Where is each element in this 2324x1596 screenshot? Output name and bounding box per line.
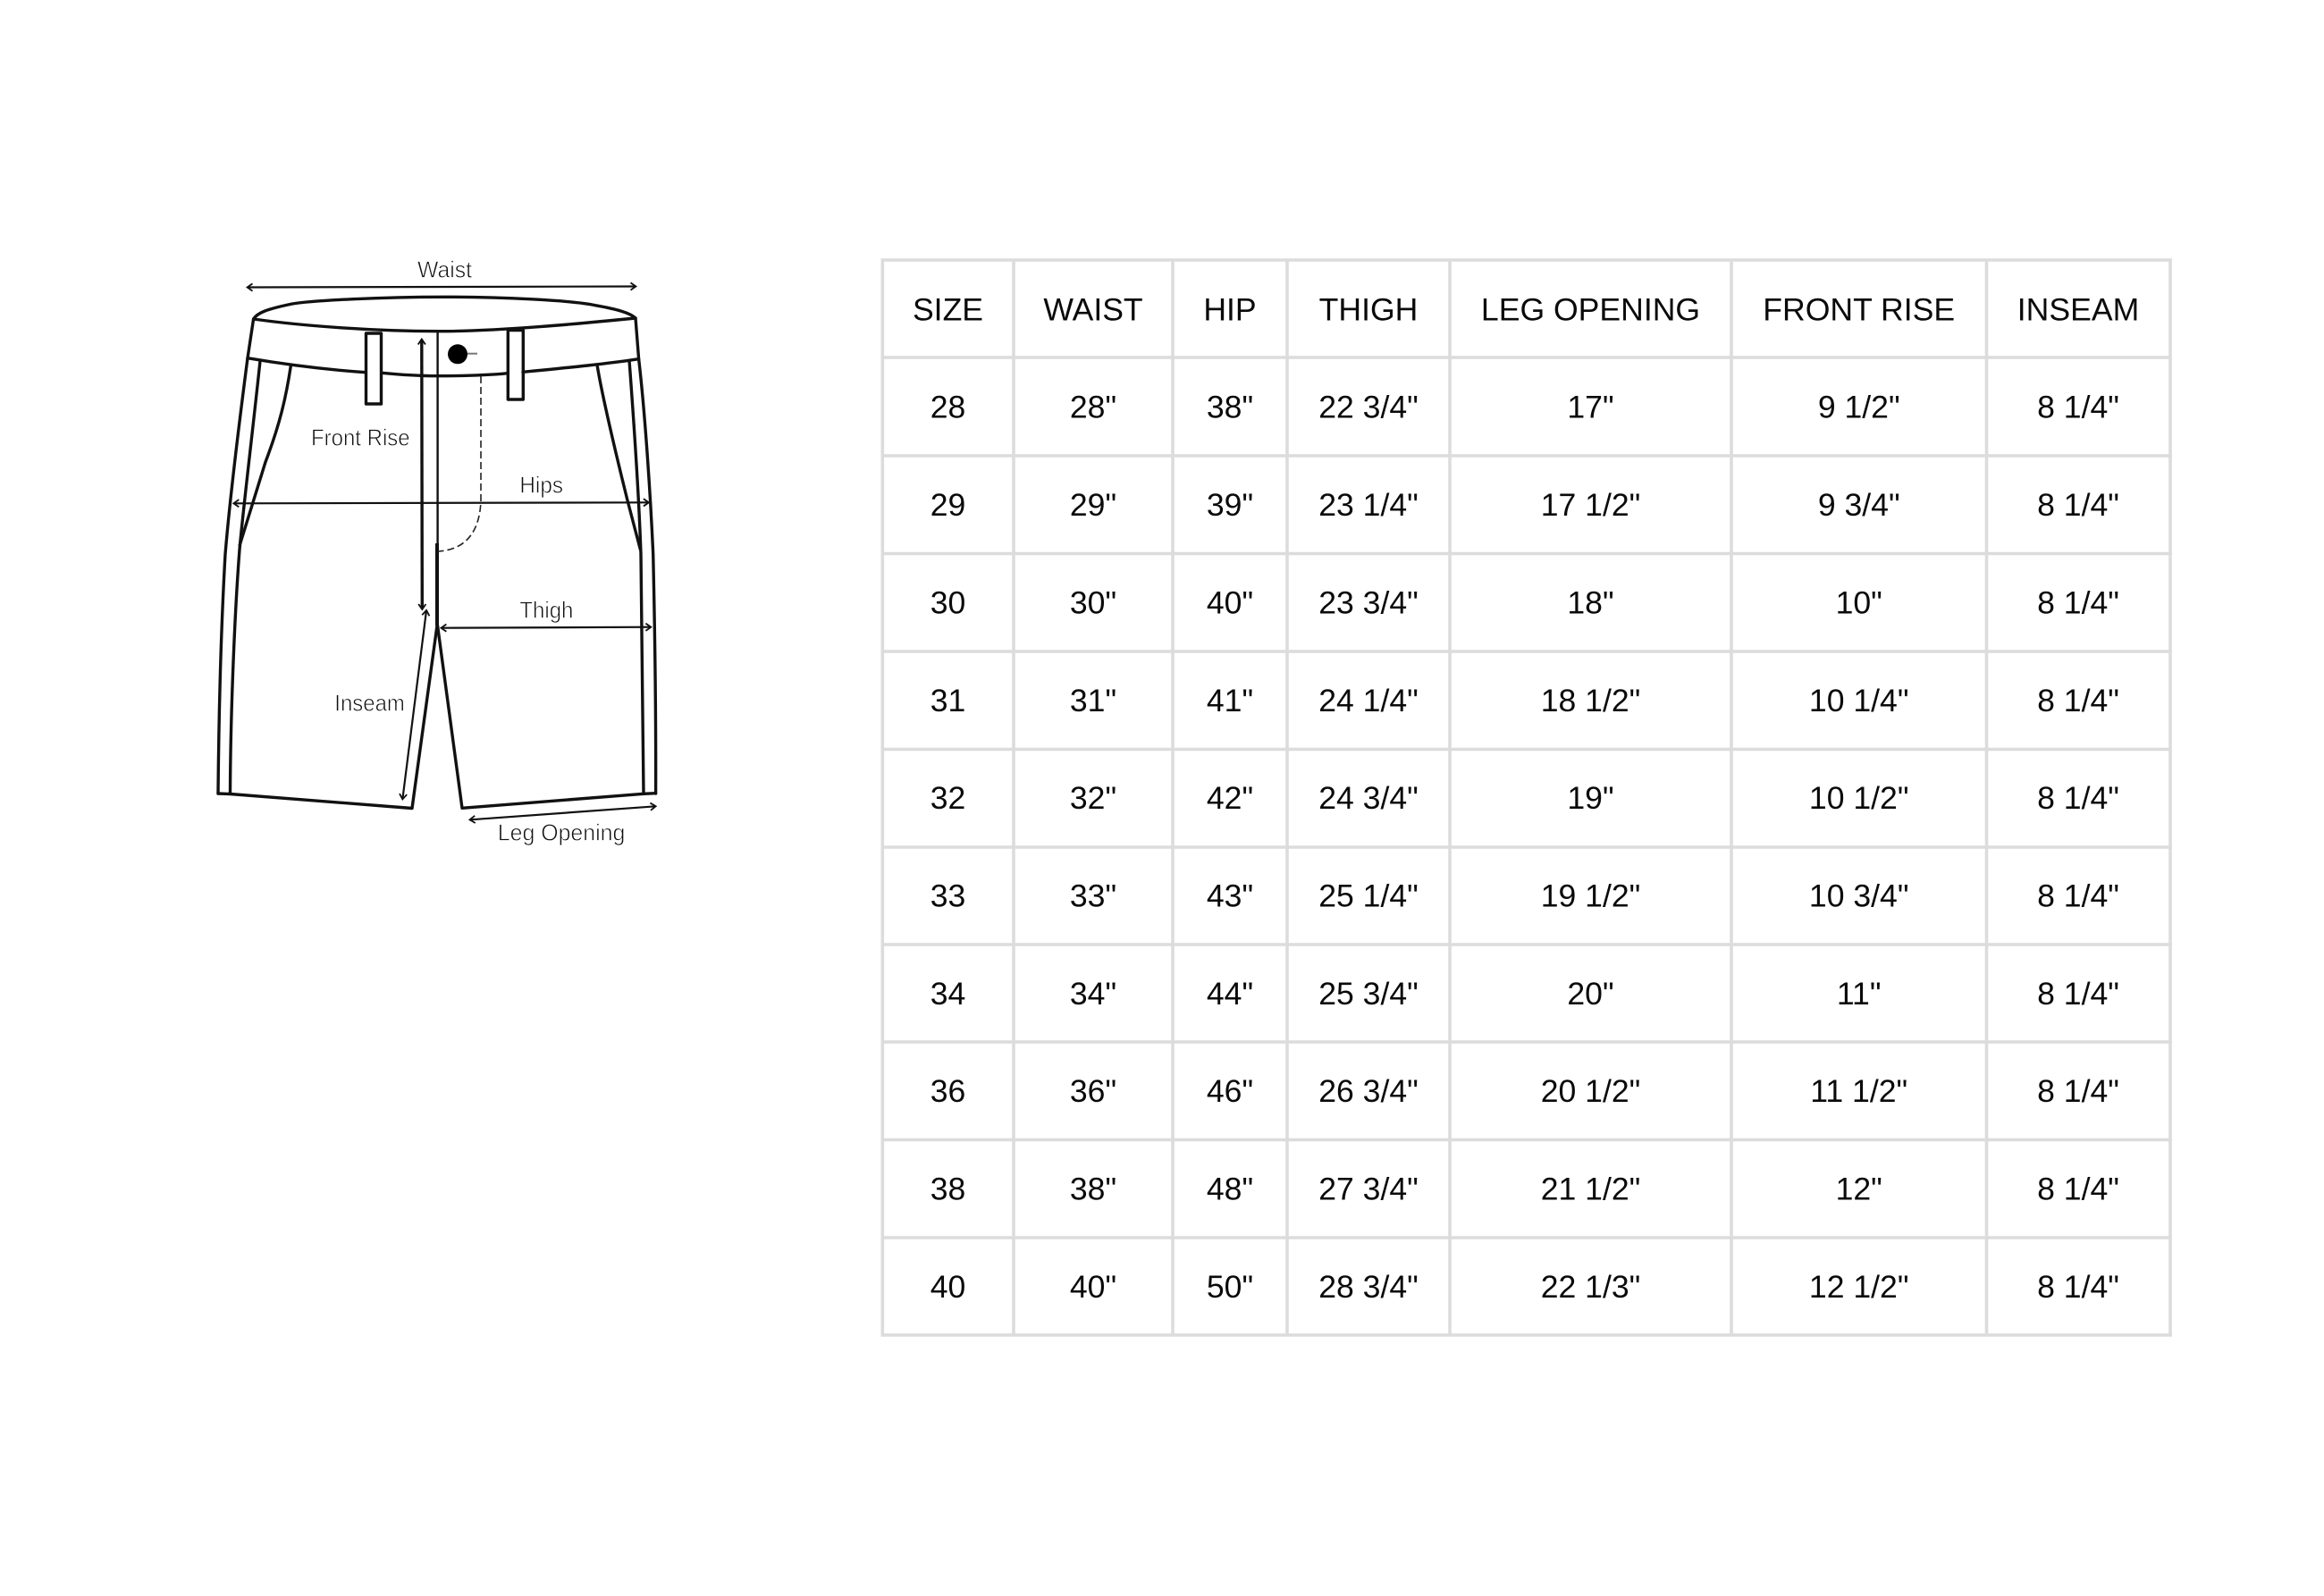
left pocket bbox=[240, 365, 290, 545]
row: size 28: 28 bbox=[930, 390, 965, 425]
row: size 28: 38" bbox=[1207, 390, 1253, 425]
row: size 40: 8 1/4" bbox=[2037, 1269, 2119, 1305]
row: size 30: 18" bbox=[1567, 584, 1614, 620]
row: size 38: 48" bbox=[1207, 1172, 1253, 1207]
row: size 33: 43" bbox=[1207, 878, 1253, 913]
button thread bbox=[467, 353, 477, 355]
size chart table bbox=[881, 260, 2172, 1335]
fly centre seam bbox=[436, 332, 439, 543]
row: size 29: 23 1/4" bbox=[1318, 487, 1419, 523]
label: thigh: Thigh bbox=[519, 597, 573, 624]
right inner side stripe bbox=[629, 360, 644, 794]
row: size 40: 40" bbox=[1070, 1269, 1116, 1305]
row: size 34: 8 1/4" bbox=[2037, 976, 2119, 1012]
row: size 33: 8 1/4" bbox=[2037, 878, 2119, 913]
row: size 31: 31" bbox=[1070, 683, 1116, 718]
arrow: thigh bbox=[442, 627, 651, 628]
row: size 32: 42" bbox=[1207, 780, 1253, 816]
arrow: inseam bbox=[402, 610, 426, 799]
row: size 34: 44" bbox=[1207, 976, 1253, 1012]
row: size 34: 25 3/4" bbox=[1318, 976, 1419, 1012]
row: size 33 bbox=[930, 878, 2119, 913]
row: size 29: 9 3/4" bbox=[1818, 487, 1900, 523]
row: size 36: 8 1/4" bbox=[2037, 1073, 2119, 1109]
row: size 40: 40 bbox=[930, 1269, 965, 1305]
table header row: INSEAM bbox=[2017, 291, 2139, 327]
row: size 29: 8 1/4" bbox=[2037, 487, 2119, 523]
diagram: shorts with measurement guides bbox=[218, 256, 656, 846]
label: front rise: Front Rise bbox=[311, 424, 410, 451]
row: size 28: 9 1/2" bbox=[1818, 390, 1900, 425]
row: size 32: 32" bbox=[1070, 780, 1116, 816]
row: size 32: 24 3/4" bbox=[1318, 780, 1419, 816]
crotch seam bbox=[435, 543, 439, 626]
row: size 32: 32 bbox=[930, 780, 965, 816]
arrow: hips bbox=[234, 502, 648, 503]
waistband lower edge bbox=[248, 358, 639, 376]
row: size 30: 23 3/4" bbox=[1318, 584, 1419, 620]
row: size 31: 41" bbox=[1207, 683, 1253, 718]
button bbox=[448, 344, 467, 364]
row: size 33: 33 bbox=[930, 878, 965, 913]
row: size 38: 27 3/4" bbox=[1318, 1172, 1419, 1207]
row: size 40 bbox=[930, 1269, 2119, 1305]
row: size 38: 21 1/2" bbox=[1541, 1172, 1640, 1207]
table header row: HIP bbox=[1203, 291, 1257, 327]
left inner side stripe bbox=[231, 361, 260, 794]
shorts outline bbox=[218, 297, 656, 808]
row: size 33: 33" bbox=[1070, 878, 1116, 913]
right pocket bbox=[597, 365, 640, 550]
row: size 28 bbox=[930, 390, 2119, 425]
row: size 31: 18 1/2" bbox=[1541, 683, 1640, 718]
row: size 28: 8 1/4" bbox=[2037, 390, 2119, 425]
row: size 34 bbox=[930, 976, 2119, 1012]
row: size 34: 20" bbox=[1567, 976, 1614, 1012]
row: size 36: 46" bbox=[1207, 1073, 1253, 1109]
row: size 31 bbox=[930, 683, 2119, 718]
row: size 36: 20 1/2" bbox=[1541, 1073, 1640, 1109]
left outer seam bbox=[218, 319, 254, 794]
row: size 38 bbox=[930, 1172, 2119, 1207]
row: size 33: 19 1/2" bbox=[1541, 878, 1640, 913]
row: size 30: 40" bbox=[1207, 584, 1253, 620]
row: size 40: 50" bbox=[1207, 1269, 1253, 1305]
row: size 32 bbox=[930, 780, 2119, 816]
row: size 36 bbox=[930, 1073, 2119, 1109]
row: size 32: 19" bbox=[1567, 780, 1614, 816]
table grid bbox=[881, 260, 2172, 1335]
table header row: SIZE bbox=[913, 291, 983, 327]
row: size 40: 28 3/4" bbox=[1318, 1269, 1419, 1305]
row: size 31: 8 1/4" bbox=[2037, 683, 2119, 718]
row: size 36: 11 1/2" bbox=[1810, 1073, 1907, 1109]
row: size 28: 28" bbox=[1070, 390, 1116, 425]
table header row: LEG OPENING bbox=[1481, 291, 1700, 327]
row: size 40: 22 1/3" bbox=[1541, 1269, 1640, 1305]
row: size 32: 10 1/2" bbox=[1809, 780, 1908, 816]
table header row: THIGH bbox=[1319, 291, 1418, 327]
arrow: leg opening bbox=[470, 806, 655, 819]
row: size 31: 31 bbox=[930, 683, 965, 718]
row: size 33: 10 3/4" bbox=[1809, 878, 1908, 913]
row: size 34: 11" bbox=[1837, 976, 1881, 1012]
right outer seam bbox=[636, 318, 656, 794]
row: size 34: 34 bbox=[930, 976, 965, 1012]
table header row bbox=[913, 291, 2139, 327]
row: size 31: 10 1/4" bbox=[1809, 683, 1908, 718]
row: size 36: 26 3/4" bbox=[1318, 1073, 1419, 1109]
label: hips: Hips bbox=[519, 472, 563, 499]
row: size 29: 39" bbox=[1207, 487, 1253, 523]
table header row: WAIST bbox=[1043, 291, 1143, 327]
row: size 28: 17" bbox=[1567, 390, 1614, 425]
left belt loop bbox=[366, 333, 381, 404]
row: size 29: 17 1/2" bbox=[1541, 487, 1640, 523]
right belt loop bbox=[508, 331, 523, 399]
label: leg opening: Leg Opening bbox=[498, 819, 625, 846]
row: size 30 bbox=[930, 584, 2119, 620]
arrow: front rise bbox=[420, 340, 424, 609]
row: size 32: 8 1/4" bbox=[2037, 780, 2119, 816]
row: size 38: 8 1/4" bbox=[2037, 1172, 2119, 1207]
row: size 34: 34" bbox=[1070, 976, 1116, 1012]
arrow: waist bbox=[248, 286, 636, 288]
right leg hem and inseam bbox=[438, 626, 656, 808]
row: size 29 bbox=[930, 487, 2119, 523]
table header row: FRONT RISE bbox=[1763, 291, 1955, 327]
row: size 28: 22 3/4" bbox=[1318, 390, 1419, 425]
row: size 31: 24 1/4" bbox=[1318, 683, 1419, 718]
row: size 38: 12" bbox=[1836, 1172, 1882, 1207]
row: size 36: 36 bbox=[930, 1073, 965, 1109]
row: size 40: 12 1/2" bbox=[1809, 1269, 1908, 1305]
row: size 30: 10" bbox=[1836, 584, 1882, 620]
row: size 38: 38 bbox=[930, 1172, 965, 1207]
row: size 30: 8 1/4" bbox=[2037, 584, 2119, 620]
row: size 29: 29" bbox=[1070, 487, 1116, 523]
row: size 30: 30 bbox=[930, 584, 965, 620]
row: size 36: 36" bbox=[1070, 1073, 1116, 1109]
row: size 33: 25 1/4" bbox=[1318, 878, 1419, 913]
label: waist: Waist bbox=[417, 256, 473, 283]
left leg hem and inseam bbox=[218, 626, 437, 808]
label: inseam: Inseam bbox=[334, 690, 405, 717]
fly stitching bbox=[438, 376, 481, 551]
row: size 30: 30" bbox=[1070, 584, 1116, 620]
waistband opening bbox=[254, 297, 636, 332]
row: size 38: 38" bbox=[1070, 1172, 1116, 1207]
row: size 29: 29 bbox=[930, 487, 965, 523]
